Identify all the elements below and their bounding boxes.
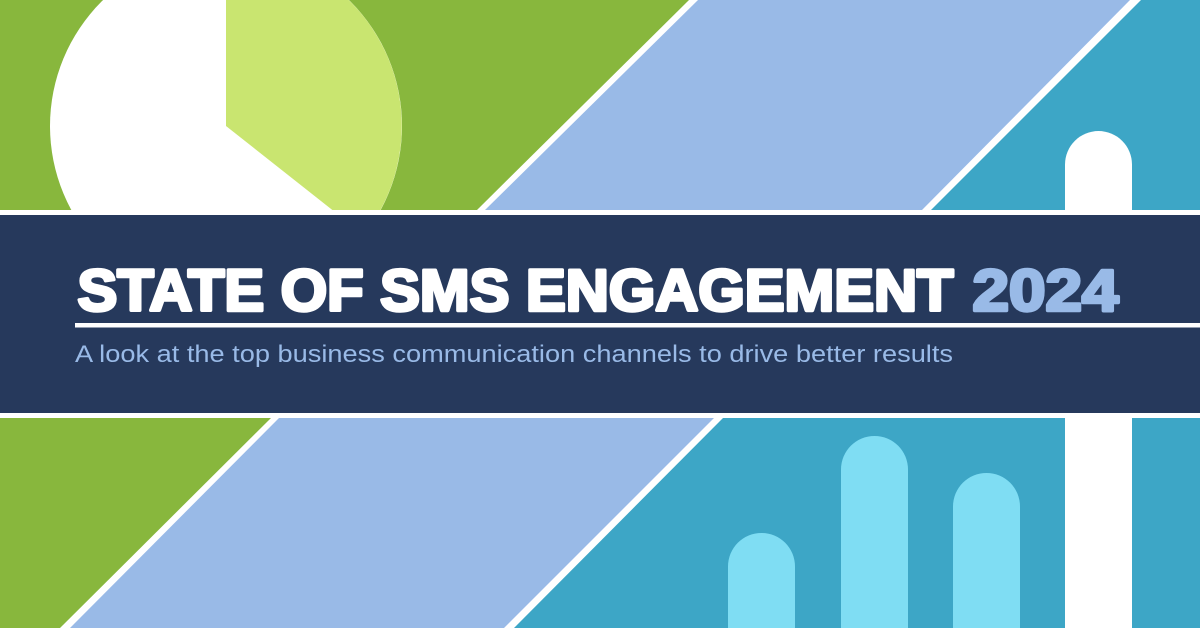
panel: top teal block [931, 0, 1200, 210]
title year: 2024 [972, 258, 1118, 324]
title: STATE OF SMS ENGAGEMENT [78, 258, 954, 324]
bar 1 [728, 533, 795, 628]
icon: pie chart [50, 0, 402, 210]
panel: bottom teal block [514, 418, 1200, 628]
title underline [75, 323, 1200, 328]
panel: bottom blue block [70, 418, 714, 628]
navy title banner [0, 215, 1200, 413]
panel: top green block [0, 0, 689, 210]
white tall bar bottom [1065, 418, 1132, 628]
panel: bottom green block [0, 418, 271, 628]
bar chart [728, 436, 1020, 628]
bar 2 [841, 436, 908, 628]
subtitle: A look at the top business communication channels to drive better results [75, 341, 953, 368]
white tall bar top [1065, 131, 1132, 211]
bar 3 [953, 473, 1020, 628]
panel: top blue block [485, 0, 1130, 210]
